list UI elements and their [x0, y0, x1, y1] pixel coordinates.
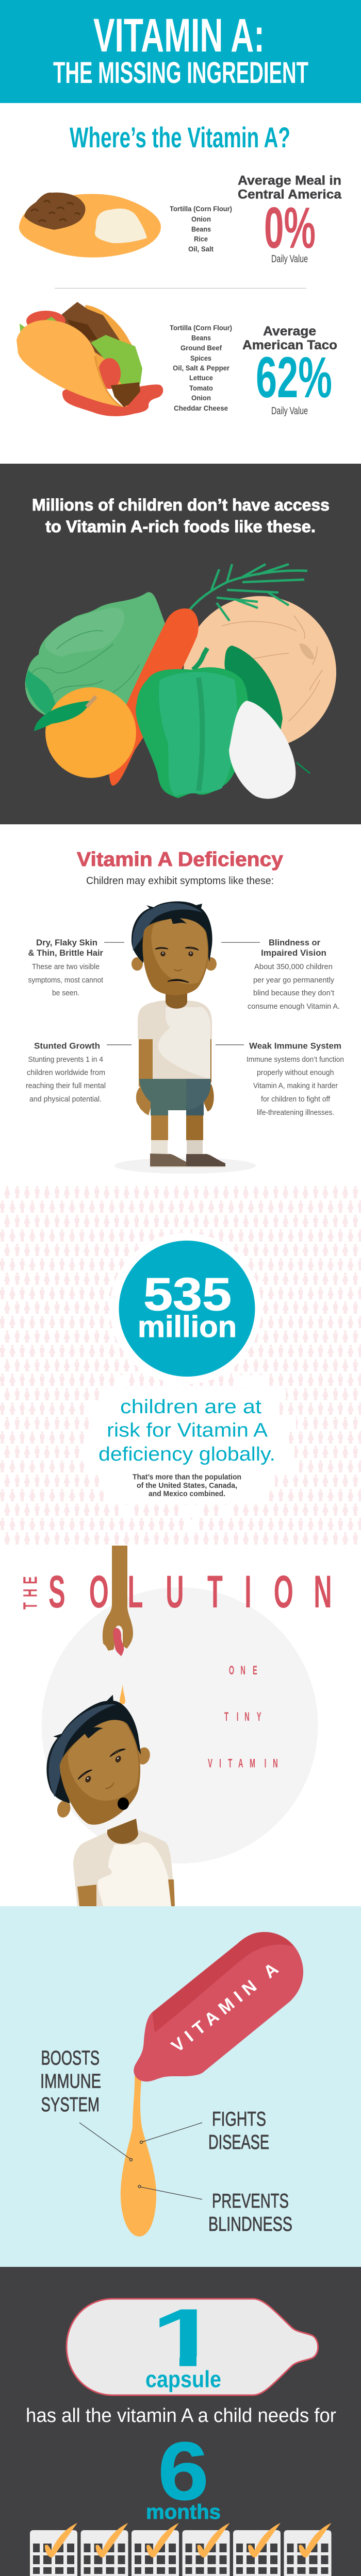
comparison note: of the United States, Canada,: [137, 1482, 237, 1490]
ingredients list: american taco: Tomato: [189, 384, 213, 392]
panel: where's the vitamin A: [0, 103, 361, 464]
callout: dry skin: These are two visible: [32, 962, 100, 971]
stat circle: million: [138, 1310, 237, 1344]
label: boosts immune system: SYSTEM: [41, 2094, 100, 2116]
panel: vitamin A rich foods: [0, 464, 361, 824]
callout: weak immune system: Vitamin A, making it harder: [253, 1081, 338, 1090]
stat: american taco 62%: Average: [263, 324, 316, 338]
icon: lettuce: [25, 592, 168, 721]
stat: american taco 62%: Daily Value: [271, 405, 308, 417]
ingredients list: american taco: Oil, Salt & Pepper: [173, 364, 230, 372]
panel: vitamin A deficiency: [0, 824, 361, 1185]
icon: orange: [34, 687, 136, 778]
stat: central america 0%: [238, 174, 342, 265]
callout: weak immune system: for children to fight off: [261, 1095, 331, 1104]
icon: green pepper: [136, 648, 248, 798]
callout: dry skin: symptoms, most cannot: [28, 976, 104, 985]
label: boosts immune system: [40, 2047, 132, 2161]
heading: the solution: SOLUTION: [48, 1567, 332, 1618]
callout: dry skin: Dry, Flaky Skin: [36, 938, 97, 947]
heading: the solution: THE: [20, 1577, 41, 1609]
stat: central america 0%: Daily Value: [271, 253, 308, 265]
callout: blindness: Impaired Vision: [261, 948, 326, 958]
ingredients list: american taco: Spices: [190, 354, 211, 362]
icon: capsule outline: 1: [151, 2292, 220, 2384]
label: boosts immune system: IMMUNE: [40, 2071, 101, 2093]
callout: dry skin: be seen.: [52, 989, 79, 997]
callout: stunted growth: Stunting prevents 1 in 4: [28, 1055, 103, 1064]
illustration: sad boy standing: [114, 901, 256, 1174]
ingredients list: american taco: Ground Beef: [180, 344, 222, 352]
ingredients list: central america: Rice: [194, 235, 208, 243]
ingredients list: american taco: Tortilla (Corn Flour): [170, 324, 232, 332]
icon: capsule outline: capsule: [145, 2366, 221, 2393]
stat caption: risk for Vitamin A: [107, 1420, 268, 1442]
one tiny vitamin text: VITAMIN: [208, 1756, 278, 1771]
stat: central america 0%: Average Meal in: [238, 174, 341, 188]
stat: american taco 62%: [242, 324, 337, 417]
icon: vitamin A capsule: VITAMIN A: [168, 1959, 282, 2056]
callout: stunted growth: Stunted Growth: [34, 1041, 100, 1051]
heading: [32, 496, 330, 536]
icon: onion: [184, 596, 336, 749]
one tiny vitamin text: ONE: [229, 1664, 257, 1677]
panel: one capsule six months: [0, 2267, 361, 2576]
ingredients list: american taco: Onion: [191, 394, 211, 402]
icon: taco: [17, 302, 163, 416]
stat: central america 0%: 0%: [264, 195, 316, 260]
icon: oil drop: [121, 2076, 156, 2236]
callout: stunted growth: reaching their full mental: [26, 1081, 106, 1090]
callout: blindness: Blindness or: [269, 938, 320, 947]
label: fights disease: FIGHTS: [212, 2108, 266, 2130]
ingredients list: central america: [170, 205, 232, 253]
panel: header: [0, 0, 361, 103]
callout: weak immune system: life-threatening illnesses.: [257, 1108, 334, 1117]
callout: weak immune system: [216, 1041, 344, 1117]
heading: Vitamin A Deficiency: [77, 849, 283, 871]
callout: weak immune system: Immune systems don’t function: [247, 1055, 344, 1064]
icon: spinach leaf: [224, 646, 310, 773]
ingredients list: central america: Oil, Salt: [188, 245, 214, 253]
illustration: boy looking up: [36, 1682, 175, 1906]
ingredients list: american taco: Lettuce: [189, 374, 213, 382]
icon: carrot greens: [182, 564, 307, 621]
callout: blindness: consume enough Vitamin A.: [248, 1002, 340, 1011]
label: fights disease: [140, 2108, 269, 2154]
stat caption: deficiency globally.: [99, 1444, 275, 1465]
callout: dry skin: [28, 938, 124, 997]
icon: drop: [120, 1684, 125, 1704]
icon: hand holding capsule: [103, 1546, 133, 1656]
title: VITAMIN A:: [93, 9, 265, 62]
ingredients list: american taco: Cheddar Cheese: [174, 404, 228, 412]
heading: Millions of children don’t have access: [32, 496, 330, 514]
icon: vitamin A capsule: [134, 1932, 303, 2081]
panel: the solution: [0, 1546, 361, 1906]
stat circle: 535: [143, 1269, 232, 1320]
label: prevents blindness: BLINDNESS: [208, 2213, 292, 2235]
comparison note: That’s more than the population: [133, 1473, 241, 1482]
one tiny vitamin text: [208, 1664, 278, 1771]
callout: stunted growth: children worldwide from: [27, 1069, 105, 1077]
stat: central america 0%: Central America: [238, 188, 342, 202]
comparison note: [133, 1473, 241, 1498]
stat: american taco 62%: American Taco: [242, 338, 337, 352]
one tiny vitamin text: TINY: [224, 1710, 261, 1724]
callout: dry skin: & Thin, Brittle Hair: [28, 948, 103, 958]
icon: white egg squash: [229, 701, 296, 799]
caption: has all the vitamin A a child needs for: [26, 2405, 336, 2427]
label: boosts immune system: BOOSTS: [41, 2047, 100, 2070]
stat caption: children are at: [120, 1396, 261, 1418]
ingredients list: central america: Tortilla (Corn Flour): [170, 205, 232, 213]
icon: carrot: [109, 608, 199, 786]
stat: 6 months: 6: [158, 2425, 209, 2517]
stat caption: [99, 1396, 275, 1465]
callout: blindness: [221, 938, 340, 1011]
icon: capsule outline: [67, 2292, 318, 2395]
label: prevents blindness: [138, 2185, 292, 2235]
subheading: Children may exhibit symptoms like these:: [86, 875, 274, 887]
stat: 6 months: [146, 2425, 221, 2523]
people pattern: [0, 1186, 361, 1546]
ingredients list: central america: Onion: [191, 215, 211, 223]
ingredients list: central america: Beans: [191, 225, 211, 233]
calendars with checkmarks: [30, 2523, 331, 2576]
ingredients list: american taco: Beans: [191, 334, 211, 342]
ingredients list: american taco: [170, 324, 232, 412]
stat: 6 months: months: [146, 2501, 221, 2523]
comparison note: and Mexico combined.: [149, 1490, 225, 1498]
callout: stunted growth: and physical potential.: [29, 1095, 102, 1104]
icon: tortilla meal: [19, 193, 161, 258]
callout: blindness: per year go permanently: [253, 976, 334, 985]
label: fights disease: DISEASE: [208, 2131, 269, 2154]
callout: blindness: blind because they don’t: [253, 989, 335, 997]
panel: capsule benefits: [0, 1906, 361, 2267]
callout: blindness: About 350,000 children: [254, 962, 333, 971]
stat circle: [119, 1241, 255, 1377]
callout: stunted growth: [26, 1041, 132, 1104]
callout: weak immune system: properly without enough: [257, 1069, 334, 1077]
callout: weak immune system: Weak Immune System: [249, 1041, 341, 1051]
heading: to Vitamin A-rich foods like these.: [45, 517, 316, 536]
label: prevents blindness: PREVENTS: [212, 2190, 289, 2212]
panel: 535 million: [0, 1186, 361, 1546]
